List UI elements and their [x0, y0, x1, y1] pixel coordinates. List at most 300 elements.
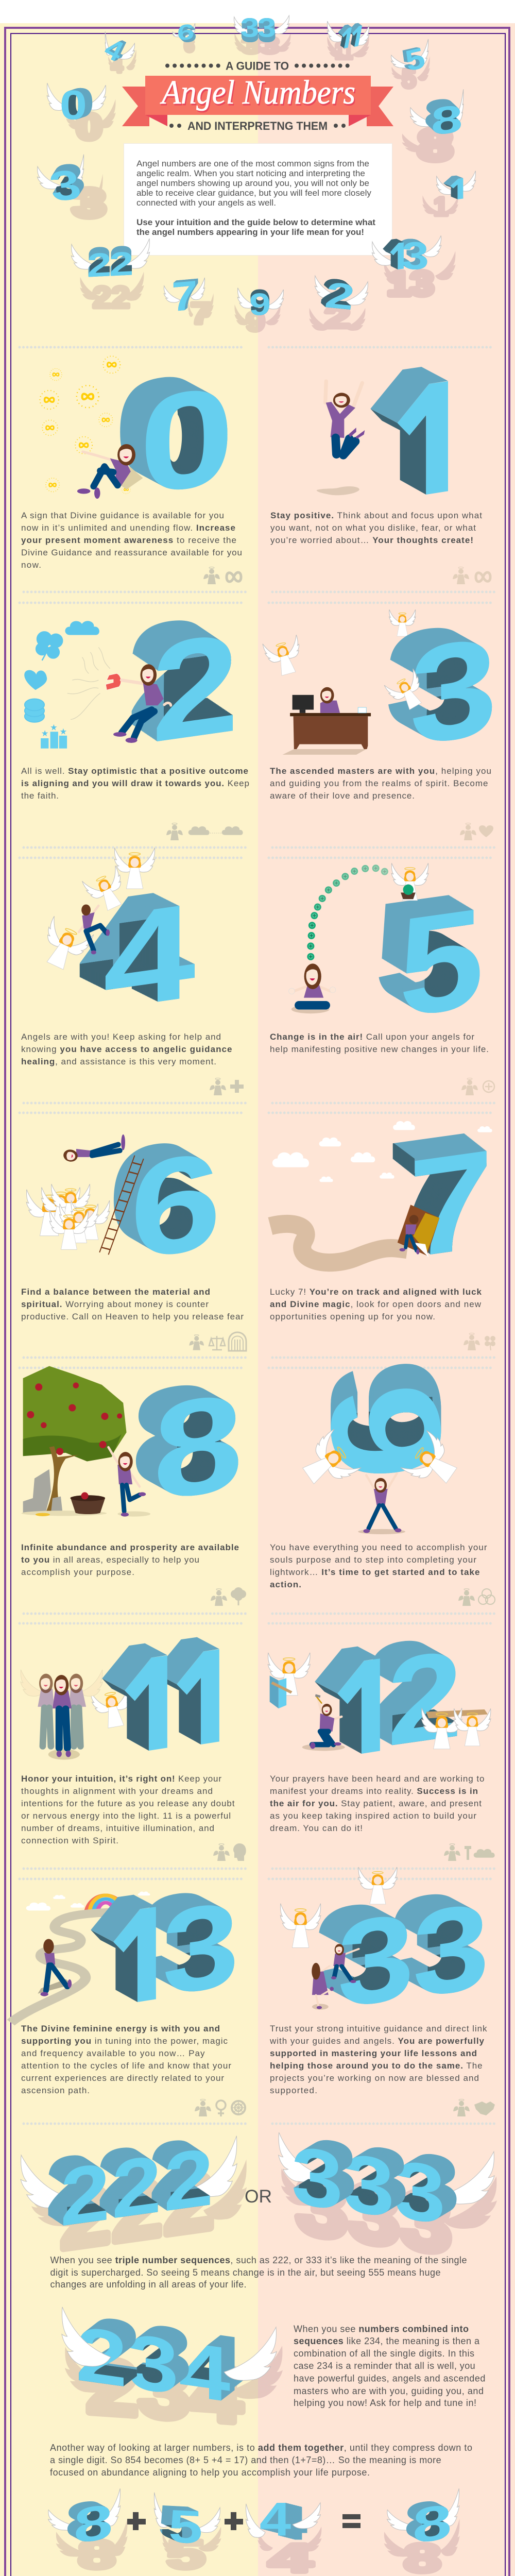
text: number 33 meaning: with your guides and angels. You are powerfully — [269, 2036, 485, 2046]
winged number 234: 3 — [127, 2317, 179, 2411]
winged number 234: 4 — [179, 2325, 230, 2419]
big numeral 7: 7 — [408, 1121, 493, 1288]
equation: 8 + 5 + 4 = 8: 4 — [260, 2493, 291, 2546]
big numeral 3 of 13: 3 — [162, 1876, 239, 2021]
winged number 11 — [327, 21, 370, 48]
text: number 13 meaning: attention to the cycles of life and know that your — [21, 2061, 231, 2071]
text: number 7 meaning: opportunities opening up for you now. — [270, 1312, 435, 1321]
big numeral 5: 5 — [399, 878, 484, 1047]
winged number 222 — [21, 2136, 236, 2228]
text: number 11 meaning — [21, 1774, 235, 1845]
winged number 6: 6 — [177, 20, 194, 45]
equation: 8 + 5 + 4 = 8 — [48, 2488, 459, 2545]
winged number 22: 2 — [87, 246, 111, 284]
text: number 13 meaning — [21, 2024, 231, 2095]
text: number 9 meaning: souls purpose and to step into completing your — [270, 1555, 476, 1565]
heading: a guide to: A GUIDE TO — [226, 60, 289, 72]
winged number 33 — [234, 13, 289, 43]
winged number 6: 6 — [177, 20, 194, 45]
text: number 6 meaning: productive. Call on Heaven to help you release fear — [21, 1312, 244, 1321]
panel: number 33: 3 — [413, 1877, 490, 2024]
winged number 333: 3 — [343, 2136, 394, 2235]
winged number 13: 3 — [402, 234, 429, 277]
icons: angel and infinity — [203, 567, 241, 584]
drop shadows of winged numbers: 8 — [78, 2532, 115, 2576]
text: number 2 meaning: All is well. Stay optimistic that a positive outcome — [21, 766, 248, 776]
intro text: angel numbers showing up around you, you will not only be — [136, 179, 369, 188]
icons: angel and two clouds — [166, 823, 243, 840]
equation: 8 + 5 + 4 = 8: 4 — [260, 2493, 291, 2546]
panel: number 33: 3 — [337, 1888, 415, 2034]
text: number 0 meaning: now. — [21, 560, 41, 570]
text: adding numbers together: focused on abundance aligning to help you accomplish your life purpose. — [50, 2467, 370, 2478]
drop shadows of winged numbers: 7 — [191, 297, 211, 330]
text: number 5 meaning: help manifesting positive new changes in your life. — [270, 1044, 489, 1054]
winged number 234: 3 — [127, 2317, 179, 2411]
winged number 9: 9 — [249, 287, 271, 322]
big numeral 3: 3 — [409, 608, 497, 775]
text: number 4 meaning — [21, 1032, 232, 1066]
panel: number 4 — [21, 848, 244, 1095]
text: number 9 meaning: action. — [270, 1580, 301, 1589]
drop shadows of winged numbers: 333 — [296, 2158, 452, 2271]
icons: angel and heart — [460, 823, 493, 840]
text: number 13 meaning: and frequency available to you now… Pay — [21, 2048, 205, 2058]
equation: 8 + 5 + 4 = 8: 8 — [413, 2494, 452, 2554]
winged number 333: 3 — [343, 2136, 394, 2235]
winged number 222: 2 — [60, 2146, 110, 2244]
intro box — [124, 143, 392, 256]
icons: angel and tree — [211, 1587, 246, 1606]
panel: number 5 — [270, 863, 495, 1095]
text: adding numbers together: Another way of looking at larger numbers, is to add them together, until they compress down to — [50, 2443, 472, 2453]
equation: 8 + 5 + 4 = 8: 5 — [168, 2500, 202, 2554]
text: number 13 meaning: supporting you in tuning into the power, magic — [21, 2036, 228, 2046]
winged number 333: 3 — [394, 2143, 445, 2242]
icons: angel, venus symbol and wheel — [195, 2099, 245, 2116]
big numeral 6: 6 — [130, 1123, 221, 1289]
winged number 333: 3 — [291, 2129, 343, 2228]
winged number 8 — [410, 89, 464, 143]
winged number 11: 1 — [351, 28, 365, 50]
text: number 2 meaning: is aligning and you will draw it towards you. Keep — [21, 778, 249, 788]
big numeral 2: 2 — [151, 604, 239, 773]
text: number 7 meaning — [270, 1287, 482, 1321]
winged number 222: 2 — [164, 2131, 213, 2229]
text: number 0 meaning: now in it’s unlimited and unending flow. Increase — [21, 523, 235, 533]
winged number 1: 1 — [453, 181, 468, 203]
intro text: able to receive clear guidance, but you will feel more closely — [136, 189, 372, 198]
title: angel numbers: Angel Numbers — [161, 75, 356, 113]
winged number 222: 2 — [60, 2146, 110, 2244]
panel: number 3 — [263, 608, 497, 840]
big numeral 8: 8 — [153, 1365, 243, 1530]
equation: 8 + 5 + 4 = 8: 8 — [74, 2494, 113, 2554]
text: number 12 meaning: as you keep taking inspired action to build your — [270, 1811, 476, 1821]
equation: 8 + 5 + 4 = 8: 8 — [74, 2494, 113, 2554]
text: numbers combined into sequences: have powerful guides, angels and ascended — [294, 2374, 485, 2384]
intro text: Use your intuition and the guide below to determine what — [136, 218, 376, 227]
panel: number 33 — [269, 1867, 495, 2116]
winged number 234: 3 — [127, 2317, 179, 2411]
intro text: angelic realm. When you start noticing and interpreting the — [136, 169, 365, 178]
winged number 333: 3 — [291, 2129, 343, 2228]
text: number 4 meaning: Angels are with you! Keep asking for help and — [21, 1032, 221, 1042]
text: triple number sequences: When you see triple number sequences, such as 222, or 333 it’s like the meaning of the single — [50, 2255, 467, 2265]
intro text: connected with your angels as well. — [136, 198, 276, 208]
text: number 11 meaning: thoughts in alignment with your dreams and — [21, 1786, 213, 1796]
winged number 3: 3 — [46, 161, 84, 210]
icons: angel and clover — [464, 1333, 495, 1350]
big numeral 9: 9 — [295, 1376, 476, 1488]
big numeral 11: 1 — [132, 1667, 182, 1767]
big numeral 3 of 13: 3 — [162, 1876, 239, 2021]
big numeral 1 of 13 — [91, 1895, 170, 2018]
text: number 4 meaning: knowing you have access to angelic guidance — [21, 1044, 232, 1054]
panel: number 33: 3 — [337, 1888, 415, 2034]
text: number 0 meaning: Divine Guidance and reassurance available for you — [21, 548, 242, 557]
text: number 8 meaning: accomplish your purpose. — [21, 1567, 134, 1577]
illustration: meditating woman, plus-sign beads and angel with cupcake — [289, 863, 428, 1013]
winged number 13 — [372, 234, 442, 277]
icons: angel and plus — [210, 1078, 244, 1095]
winged number 9 — [237, 287, 284, 322]
big numeral 0: 0 — [139, 357, 234, 524]
big numeral 8: 8 — [153, 1365, 243, 1530]
text: number 12 meaning — [270, 1774, 484, 1833]
text: number 0 meaning: your present moment awareness to receive the — [21, 535, 236, 545]
panel: number 1 — [270, 367, 491, 584]
winged number 2 — [314, 275, 369, 318]
big numeral 8: 8 — [153, 1365, 243, 1530]
illustration: apple tree and woman picking apple — [21, 1366, 150, 1517]
text: number 13 meaning: ascension path. — [21, 2086, 90, 2095]
big numeral 1 — [370, 367, 448, 495]
winged number 234 — [62, 2307, 276, 2404]
equation: 8 + 5 + 4 = 8: 8 — [413, 2494, 452, 2554]
panel: number 8 — [21, 1365, 246, 1606]
big numeral 3: 3 — [409, 608, 497, 775]
illustration: two women climbing with angels — [280, 1904, 358, 2010]
big numeral 9: 9 — [295, 1376, 476, 1488]
winged number 234: 2 — [76, 2310, 127, 2404]
winged number 33: 3 — [258, 13, 276, 43]
text: number 5 meaning — [270, 1032, 489, 1054]
big numeral 2: 2 — [151, 604, 239, 773]
big numeral 7: 7 — [408, 1121, 493, 1288]
text: adding numbers together: a single digit. So 854 becomes (8+ 5 +4 = 17) and then (1+7=8)… So the meaning is more — [50, 2455, 441, 2465]
text: number 9 meaning — [270, 1543, 487, 1589]
big numeral 6: 6 — [130, 1123, 221, 1289]
illustration: clouds, winding path and woman at open door — [270, 1121, 492, 1263]
big numeral 4: 4 — [103, 875, 196, 1039]
panel: number 33: 3 — [413, 1877, 490, 2024]
text: number 33 meaning: supported. — [270, 2086, 317, 2095]
big numeral 0: 0 — [139, 357, 234, 524]
winged number 8: 8 — [431, 97, 462, 143]
icons: angel and infinity — [453, 567, 490, 584]
winged number 13: 1 — [392, 246, 408, 275]
panel: number 2 — [21, 604, 249, 840]
illustration: woman with magnet attracting symbols: ★ — [50, 723, 58, 733]
panel: number 13 — [7, 1876, 246, 2116]
winged number 234: 4 — [179, 2325, 230, 2419]
text: number 11 meaning: connection with Spirit. — [21, 1836, 118, 1845]
panel: number 0 — [21, 355, 242, 584]
drop shadows of winged numbers: 6 — [184, 36, 194, 56]
big numeral 11: 1 — [184, 1660, 234, 1760]
intro text: the angel numbers appearing in your life mean for you! — [136, 228, 364, 237]
illustration: floating woman, ladder and angels — [26, 1134, 144, 1255]
icons: angel, scale and gate — [189, 1332, 246, 1351]
text: number 11 meaning: intentions for the future as you release any doubt — [21, 1799, 235, 1808]
winged number 333: 3 — [394, 2143, 445, 2242]
text: number 13 meaning: The Divine feminine energy is with you and — [21, 2024, 220, 2033]
text: number 3 meaning: The ascended masters are with you, helping you — [270, 766, 491, 776]
text: number 2 meaning: the faith. — [21, 791, 59, 801]
winged number 1 — [436, 171, 476, 199]
winged number 222: 2 — [164, 2131, 213, 2229]
equation: 8 + 5 + 4 = 8: 5 — [168, 2500, 202, 2554]
big numeral 1 of 12 — [315, 1647, 394, 1770]
text: number 5 meaning: Change is in the air! Call upon your angels for — [270, 1032, 474, 1042]
page background halves — [0, 23, 258, 2576]
winged number 333 — [279, 2132, 494, 2226]
text: number 1 meaning: Stay positive. Think about and focus upon what — [270, 511, 482, 520]
equation: 8 + 5 + 4 = 8: 8 — [413, 2494, 452, 2554]
winged number 22: 2 — [87, 246, 111, 284]
text: numbers combined into sequences: combination of all the single digits. In this — [294, 2348, 474, 2359]
equation: 8 + 5 + 4 = 8: 8 — [74, 2494, 113, 2554]
big numeral 9: 9 — [295, 1376, 476, 1488]
text: number 12 meaning: manifest your dreams into reality. Success is in — [270, 1786, 478, 1796]
drop shadows of winged numbers: 5 — [402, 64, 416, 93]
text: number 8 meaning — [21, 1543, 239, 1577]
big numeral 1 of 12: 1 — [345, 1670, 394, 1770]
big numeral 2: 2 — [151, 604, 239, 773]
panel: number 11 — [21, 1637, 246, 1861]
title: angel numbers: Angel Numbers — [160, 74, 355, 111]
winged number 0 — [46, 82, 106, 128]
text: number 3 meaning — [270, 766, 491, 801]
ribbon banner — [122, 76, 393, 126]
winged number 234: 2 — [76, 2310, 127, 2404]
winged number 7: 7 — [171, 272, 197, 320]
text: number 12 meaning: dream. You can do it! — [270, 1823, 363, 1833]
winged number 333: 3 — [394, 2143, 445, 2242]
text: numbers combined into sequences: When you see numbers combined into — [294, 2324, 469, 2334]
winged number 333: 3 — [343, 2136, 394, 2235]
winged number 8: 8 — [431, 97, 462, 143]
winged number 22: 2 — [109, 245, 133, 283]
panel: number 12 — [268, 1624, 495, 1861]
winged number 4: 4 — [100, 32, 128, 68]
drop shadows of winged numbers: 234 — [87, 2343, 242, 2439]
big numeral 5: 5 — [399, 878, 484, 1047]
big numeral 1 of 13: 1 — [121, 1918, 170, 2018]
drop shadows of winged numbers: 9 — [246, 307, 265, 337]
illustration: woman and angels holding up the nine — [295, 1429, 465, 1534]
icons: angel, hammer and cloud — [444, 1843, 495, 1861]
drop shadows of winged numbers: 8 — [418, 121, 452, 169]
drop shadows of winged numbers: 4 — [111, 54, 123, 77]
drop shadows of winged numbers: 222 — [61, 2155, 214, 2266]
text: number 0 meaning: A sign that Divine guidance is available for you — [21, 511, 224, 520]
illustration: angels helping woman climb — [35, 848, 155, 975]
winged number 5 — [390, 39, 428, 77]
winged number 222: 2 — [112, 2138, 161, 2236]
text: number 33 meaning — [269, 2024, 487, 2095]
winged number 0: 0 — [60, 82, 87, 128]
winged number 4: 4 — [100, 32, 128, 68]
winged number 0: 0 — [60, 82, 87, 128]
winged number 7 — [164, 272, 205, 320]
big numeral 2 of 12: 2 — [387, 1624, 462, 1773]
big numeral 5: 5 — [399, 878, 484, 1047]
illustration: woman reaching for infinity symbols — [40, 356, 143, 499]
drop shadows of winged numbers: 2 — [324, 301, 350, 334]
drop shadows of winged numbers: 3 — [73, 181, 105, 225]
text: number 6 meaning: spiritual. Worrying about money is counter — [21, 1299, 209, 1309]
text: number 12 meaning: the air for you. Stay patient, aware, and present — [270, 1799, 482, 1808]
text: number 1 meaning: you’re worried about… Your thoughts create! — [270, 535, 473, 545]
text: triple number sequences: changes are unfolding in all areas of your life. — [50, 2279, 246, 2290]
drop shadows of winged numbers: 11 — [335, 37, 353, 64]
big numeral 1: 1 — [406, 395, 466, 514]
text: number 11 meaning: or nervous energy into the light. 11 is a powerful — [21, 1811, 231, 1821]
text: numbers combined into sequences: sequences like 234, the meaning is then a — [294, 2336, 480, 2346]
drop shadows of winged numbers: 0 — [76, 107, 102, 147]
text: number 1 meaning — [270, 511, 482, 545]
illustration: woman at desk with angels — [263, 635, 430, 755]
illustration: woman with magnet attracting symbols: ★ — [41, 728, 49, 738]
text: number 3 meaning: aware of their love and presence. — [270, 791, 415, 801]
text: number 12 meaning: Your prayers have been heard and are working to — [270, 1774, 484, 1784]
panel: number 33: 3 — [337, 1888, 415, 2034]
text: triple number sequences: digit is supercharged. So seeing 5 means change is in the air, but seeing 555 means huge — [50, 2267, 441, 2278]
winged number 22: 2 — [109, 245, 133, 283]
big numeral 3: 3 — [409, 608, 497, 775]
big numeral 4: 4 — [103, 875, 196, 1039]
winged number 3: 3 — [46, 161, 84, 210]
winged number 22 — [71, 238, 150, 284]
text: number 13 meaning: current experiences are directly related to your — [21, 2073, 224, 2083]
winged number 2: 2 — [322, 275, 357, 318]
winged number 5: 5 — [402, 41, 428, 77]
drop shadows of winged numbers: 33 — [242, 33, 279, 58]
text: number 11 meaning: Honor your intuition, it’s right on! Keep your — [21, 1774, 221, 1784]
text: number 3 meaning: and guiding you from the realms of spirit. Become — [270, 778, 488, 788]
drop shadows of winged numbers: 22 — [93, 281, 130, 314]
big numeral 4: 4 — [103, 875, 196, 1039]
text: number 6 meaning: Find a balance between the material and — [21, 1287, 210, 1297]
winged number 7: 7 — [171, 272, 197, 320]
big numeral 3 of 13: 3 — [162, 1876, 239, 2021]
winged number 2: 2 — [322, 275, 357, 318]
big numeral 2 of 12: 2 — [387, 1624, 462, 1773]
winged number 234: 2 — [76, 2310, 127, 2404]
winged number 333: 3 — [291, 2129, 343, 2228]
text: number 7 meaning: Lucky 7! You’re on track and aligned with luck — [270, 1287, 482, 1297]
icons: angel and circled plus — [461, 1078, 494, 1095]
winged number 13: 3 — [402, 234, 429, 277]
icons: angel and handshake — [453, 2099, 495, 2116]
illustration: three praying women with wings — [21, 1670, 102, 1760]
text: number 33 meaning: projects you’re working on now are blessed and — [270, 2073, 479, 2083]
drop shadows of winged numbers: 1 — [434, 192, 448, 221]
text: number 8 meaning: Infinite abundance and prosperity are available — [21, 1543, 239, 1552]
text: number 2 meaning — [21, 766, 249, 801]
title block — [122, 60, 393, 132]
panel: number 9 — [270, 1364, 495, 1606]
text: number 33 meaning: Trust your strong intuitive guidance and direct link — [270, 2024, 487, 2033]
icons: angel and triquetra — [458, 1589, 495, 1606]
winged number 33: 3 — [241, 13, 259, 43]
big numeral 11 — [102, 1637, 234, 1767]
big numeral 0: 0 — [139, 357, 234, 524]
text: numbers combined into sequences: masters who are with you, guiding you, and — [294, 2386, 484, 2396]
big numeral 2 of 12: 2 — [387, 1624, 462, 1773]
intro text: Angel numbers are one of the most common signs from the — [136, 159, 369, 168]
drop shadows of winged numbers: 5 — [167, 2532, 205, 2576]
winged number 8: 8 — [431, 97, 462, 143]
text: number 0 meaning — [21, 511, 242, 570]
winged number 222: 2 — [112, 2138, 161, 2236]
winged number 234: 4 — [179, 2325, 230, 2419]
text: numbers combined into sequences: case 234 is a reminder that all is well, you — [294, 2361, 475, 2371]
icons: angel and head with third eye — [213, 1843, 246, 1861]
winged number 33: 3 — [258, 13, 276, 43]
drop shadows of winged numbers: 13 — [387, 264, 434, 302]
illustration: woman hammering with builder angels — [268, 1653, 491, 1751]
panel: number 6 — [21, 1123, 247, 1352]
text: number 6 meaning — [21, 1287, 244, 1321]
illustration: woman with magnet attracting symbols: ★ — [59, 726, 67, 736]
illustration: woman walking on road — [38, 1939, 72, 1996]
big numeral 33 — [319, 1877, 490, 2034]
winged number 222: 2 — [60, 2146, 110, 2244]
text: number 11 meaning: number of dreams, intuitive illumination, and — [21, 1823, 214, 1833]
text: numbers combined into sequences: helping you now! Ask for help and tune in! — [294, 2398, 476, 2408]
panel: number 7 — [268, 1121, 495, 1350]
or label: OR — [245, 2187, 272, 2207]
text: number 7 meaning: and Divine magic, look for open doors and new — [270, 1299, 482, 1309]
illustration: rainbow, clouds and winding road behind — [11, 1891, 150, 2023]
winged number 11: 1 — [340, 30, 354, 52]
winged number 33: 3 — [241, 13, 259, 43]
big numeral 6: 6 — [130, 1123, 221, 1289]
winged number 3: 3 — [46, 161, 84, 210]
winged number 9: 9 — [249, 287, 271, 322]
winged number 22: 2 — [87, 246, 111, 284]
text: number 8 meaning: to you in all areas, especially to help you — [21, 1555, 199, 1565]
text: number 1 meaning: you want, not on what you dislike, fear, or what — [270, 523, 476, 533]
winged number 5: 5 — [402, 41, 428, 77]
equation: 8 + 5 + 4 = 8: 5 — [168, 2500, 202, 2554]
text: number 33 meaning: helping those around you to do the same. The — [270, 2061, 483, 2071]
text: number 9 meaning: lightwork… It’s time to get started and to take — [270, 1567, 480, 1577]
illustration: woman with magnet attracting symbols — [24, 621, 171, 749]
text: number 33 meaning: supported in mastering your life lessons and — [270, 2048, 477, 2058]
panel: number 33: 3 — [413, 1877, 490, 2024]
big numeral 7: 7 — [408, 1121, 493, 1288]
text: number 9 meaning: You have everything you need to accomplish your — [270, 1543, 487, 1552]
text: number 4 meaning: healing, and assistance is this very moment. — [21, 1057, 216, 1066]
subheading: AND INTERPRETNG THEM — [187, 120, 328, 132]
winged number 222: 2 — [112, 2138, 161, 2236]
winged number 22: 2 — [109, 245, 133, 283]
winged number 0: 0 — [60, 82, 87, 128]
